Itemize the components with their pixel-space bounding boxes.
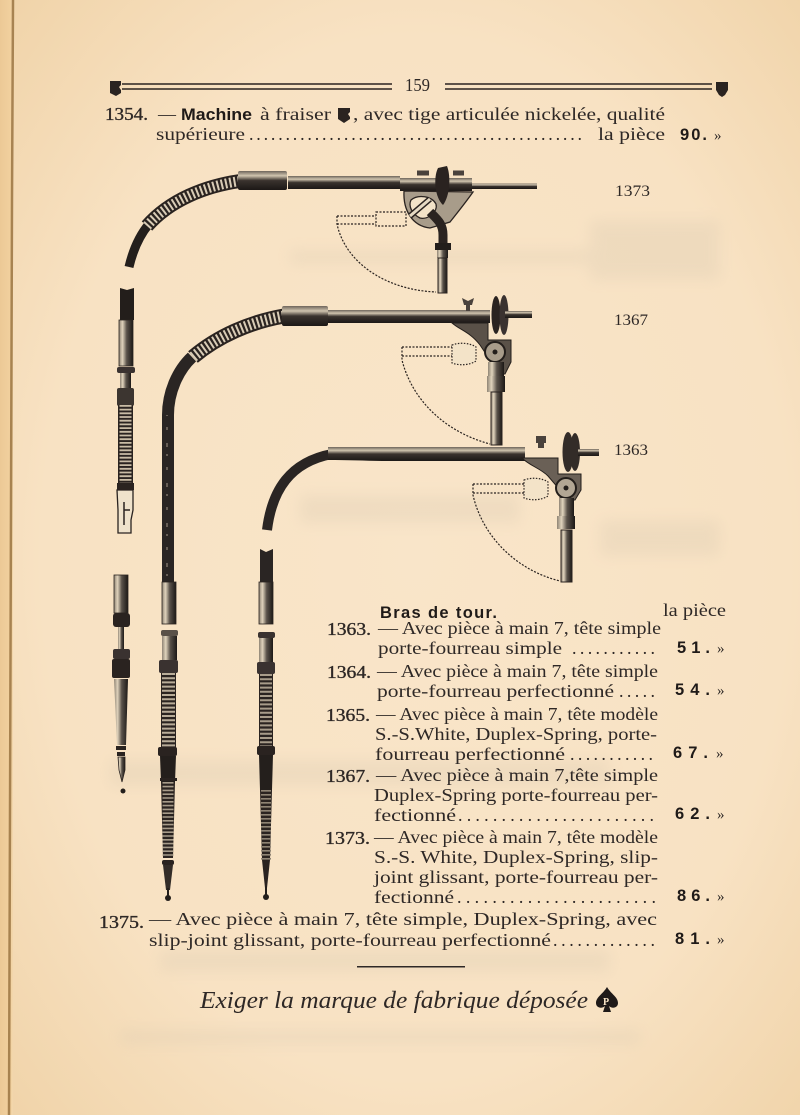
thumb screw: [462, 298, 474, 311]
entry 1363: ...........: [572, 638, 655, 658]
entry 1364: 1364.: [327, 662, 371, 682]
entry 1375: — Avec pièce à main 7, tête simple, Duplex-Spring, avec: [148, 909, 657, 929]
stem: [430, 212, 443, 243]
entry 1373: .......................: [457, 887, 656, 907]
item 1354: ..............................................: [249, 124, 582, 144]
heading: Bras de tour.: [380, 604, 497, 622]
item 1354: , avec tige articulée nickelée, qualité: [353, 104, 665, 124]
entry 1363: 51.: [677, 639, 710, 657]
entry 1375: »: [717, 932, 724, 948]
entry 1364: porte-fourreau perfectionné: [377, 681, 614, 701]
illustration: handpiece top left: [117, 288, 135, 533]
illustration: long handpiece 1367: [158, 582, 178, 901]
pulley: [492, 296, 500, 334]
figure labels: 1363: [614, 442, 648, 459]
entry 1364: [327, 661, 724, 701]
entry 1364: .....: [619, 681, 655, 701]
entry 1363: 1363.: [327, 619, 371, 639]
item 1354: Machine: [181, 106, 252, 124]
item 1354: —: [157, 104, 177, 124]
entry 1375: 1375.: [99, 912, 144, 932]
spring: [118, 405, 133, 483]
entry 1367: fectionné: [374, 805, 456, 825]
rod: [328, 447, 525, 461]
page number: 159: [405, 75, 430, 95]
head and bracket: [404, 191, 473, 228]
entry 1365: — Avec pièce à main 7, tête modèle: [375, 704, 658, 724]
entry 1365: ...........: [570, 744, 653, 764]
entry 1367: [326, 765, 724, 825]
icon: spade trademark: P: [603, 997, 609, 1008]
item 1354: supérieure: [156, 124, 245, 144]
entry 1373: fectionné: [374, 887, 454, 907]
entry 1363: »: [717, 641, 724, 657]
figure labels: 1367: [614, 312, 648, 329]
bracket: [452, 323, 511, 374]
entry 1375: .............: [553, 930, 655, 950]
dotted arc: [337, 216, 436, 292]
black curved tube: [267, 454, 332, 530]
stem: [559, 498, 574, 516]
entry 1375: [99, 909, 724, 950]
dotted arc: [473, 484, 560, 581]
bracket: [522, 458, 581, 500]
price list: bras de tour: [99, 600, 726, 950]
entry 1373: 86.: [677, 887, 710, 905]
entry 1364: 54.: [675, 681, 710, 699]
item 1354: »: [714, 128, 722, 144]
entry 1364: — Avec pièce à main 7, tête simple: [376, 661, 658, 681]
ornament: right: [716, 82, 728, 97]
spring: [193, 316, 284, 357]
collar: [282, 306, 328, 326]
entry 1365: 67.: [673, 744, 708, 762]
stem: [488, 362, 504, 376]
entry 1364: »: [717, 683, 724, 699]
entry 1365: 1365.: [326, 705, 370, 725]
illustration: arm 1367: [167, 295, 532, 590]
icon: spade trademark: [596, 987, 618, 1012]
item 1354: 1354.: [105, 104, 148, 124]
entry 1367: Duplex-Spring porte-fourreau per-: [374, 785, 658, 805]
figure labels: 1373: [615, 183, 650, 200]
rod: [288, 176, 400, 189]
entry 1373: S.-S. White, Duplex-Spring, slip-: [374, 847, 658, 867]
entry 1373: joint glissant, porte-fourreau per-: [373, 867, 658, 887]
entry 1365: fourreau perfectionné: [375, 744, 565, 764]
rod: [328, 310, 490, 323]
entry 1367: 62.: [675, 805, 710, 823]
item 1354: la pièce: [598, 124, 665, 144]
entry 1363: porte-fourreau simple: [378, 638, 562, 658]
entry 1367: — Avec pièce à main 7,tête simple: [375, 765, 658, 785]
entry 1373: 1373.: [325, 828, 370, 848]
ornament: left: [110, 81, 121, 96]
entry 1365: [326, 704, 724, 764]
thumb screw: [536, 436, 546, 448]
page header with rules and page number: [110, 75, 728, 97]
entry 1363: [327, 618, 724, 658]
item 1354: [105, 104, 722, 144]
dotted arc: [402, 347, 490, 444]
entry 1367: »: [717, 807, 724, 823]
short divider rule: [357, 966, 465, 968]
column label: la pièce: [663, 600, 726, 620]
illustration: arm 1373: [129, 166, 537, 293]
entry 1375: slip-joint glissant, porte-fourreau perfectionné: [149, 930, 551, 950]
spring: [147, 181, 240, 226]
black tube: [168, 357, 192, 590]
entry 1375: 81.: [675, 930, 710, 948]
entry 1373: [325, 827, 724, 907]
entry 1365: »: [716, 746, 724, 762]
illustration: arm 1363: [267, 432, 599, 582]
illustration: handpiece bottom left: [112, 575, 130, 794]
collar: [238, 171, 287, 190]
entry 1367: .......................: [458, 805, 654, 825]
trademark line: Exiger la marque de fabrique déposée: [199, 988, 588, 1014]
figure labels: [614, 183, 650, 459]
entry 1373: »: [717, 889, 724, 905]
item 1354: 90.: [680, 126, 707, 144]
entry 1365: S.-S.White, Duplex-Spring, porte-: [375, 724, 657, 744]
entry 1363: — Avec pièce à main 7, tête simple: [377, 618, 661, 638]
item 1354: à fraiser: [260, 104, 331, 124]
entry 1373: — Avec pièce à main 7, tête modèle: [373, 827, 658, 847]
black tube: [129, 224, 149, 267]
pulley: [562, 432, 574, 472]
illustration: long handpiece 1363: [257, 549, 275, 900]
entry 1367: 1367.: [326, 766, 370, 786]
